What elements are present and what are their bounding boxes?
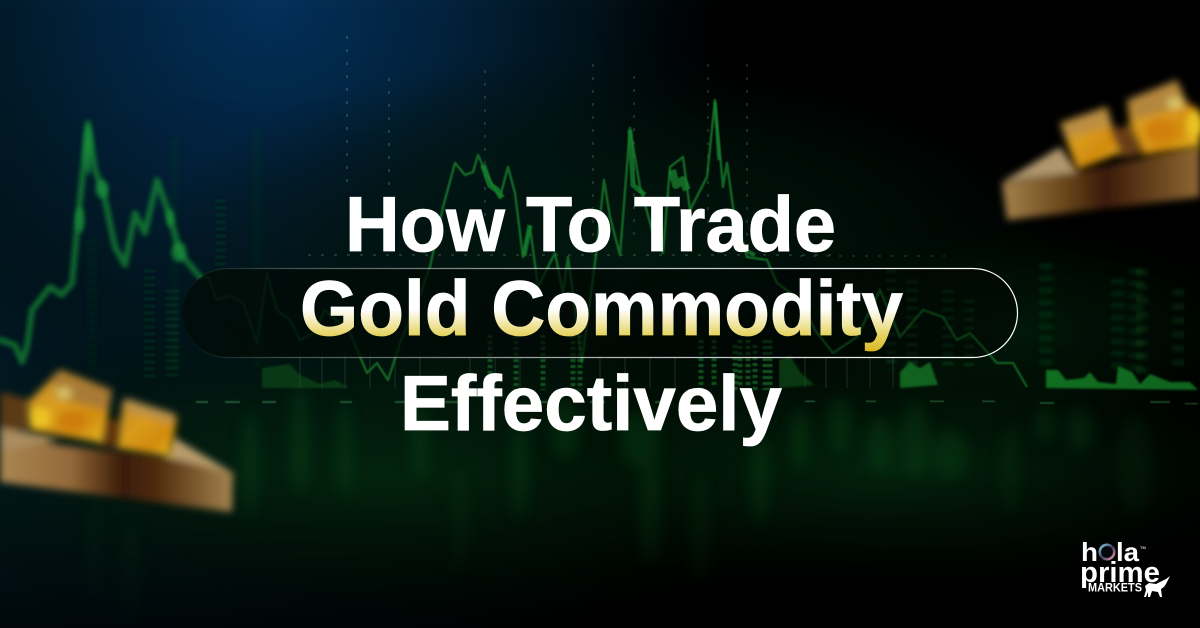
icon: bull — [1144, 576, 1170, 597]
title line 2: gold gradient: Gold Commodity — [300, 264, 903, 352]
histogram columns — [92, 130, 1180, 390]
logo: hola prime markets — [1080, 537, 1170, 597]
logo word: hola: TM — [1140, 545, 1146, 550]
logo word: hola — [1081, 537, 1146, 567]
horizon dashes — [8, 401, 1198, 404]
chart: left blurred line — [0, 123, 200, 362]
thin vertical ticks — [300, 350, 893, 388]
logo word: markets: MARKETS — [1088, 582, 1142, 594]
chart: middle green line — [200, 100, 1027, 387]
pill highlight behind the second line — [182, 268, 1018, 358]
logo word: hola: la — [1116, 537, 1140, 567]
dotted grid lines — [308, 36, 945, 256]
chart: base mass and horizon — [0, 355, 1200, 390]
gold tray: bottom left — [0, 370, 233, 512]
logo word: hola: h — [1081, 537, 1098, 567]
logo word: prime: prime — [1080, 557, 1160, 589]
gold tray: top right — [1002, 80, 1200, 220]
title — [300, 180, 903, 447]
title line 1: How To Trade — [345, 180, 836, 268]
title line 3: Effectively — [400, 359, 782, 447]
blurred reflection — [86, 385, 1153, 620]
